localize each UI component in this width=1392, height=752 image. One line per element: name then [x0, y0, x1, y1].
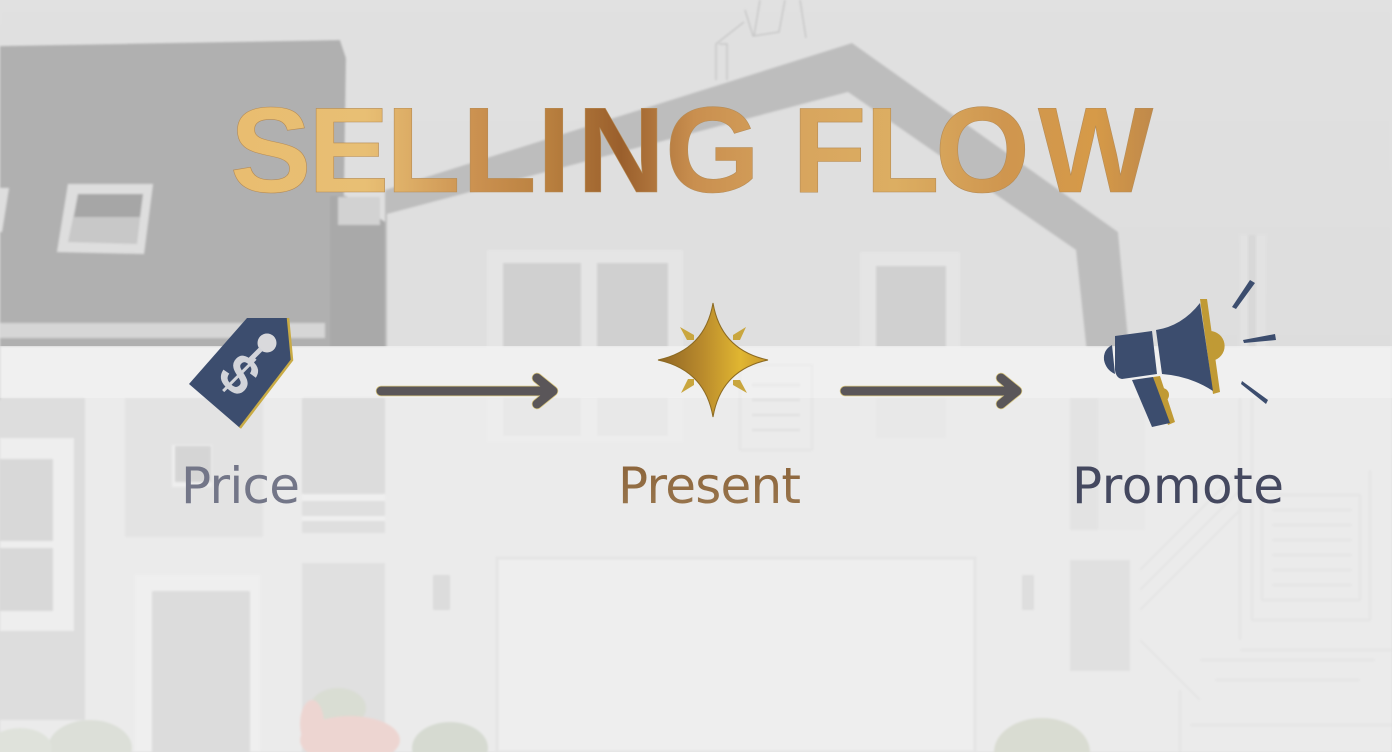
skylight window	[57, 184, 153, 254]
upper windows	[487, 250, 683, 440]
step 2: present	[618, 303, 801, 515]
step 3: promote	[1072, 280, 1284, 515]
icon: gold star sparkle	[658, 303, 768, 417]
lower washed-out facade	[0, 346, 1392, 752]
gutter bracket	[338, 197, 380, 225]
arrow: present to promote	[845, 378, 1017, 404]
icon: megaphone	[1104, 280, 1276, 427]
arrow: price to present	[381, 378, 553, 404]
translucent band	[0, 346, 1392, 398]
icon: price tag	[189, 318, 292, 428]
title: SELLING FLOW	[230, 82, 1154, 218]
label: Present: Present	[618, 457, 801, 515]
step 1: price	[181, 318, 300, 515]
icon: price tag: $	[206, 341, 273, 408]
antenna lines	[716, 0, 806, 80]
left roof	[0, 40, 385, 400]
label: Price: Price	[181, 457, 300, 515]
gable	[385, 43, 1146, 532]
label: Promote: Promote	[1072, 457, 1284, 515]
right pole	[1240, 235, 1266, 355]
